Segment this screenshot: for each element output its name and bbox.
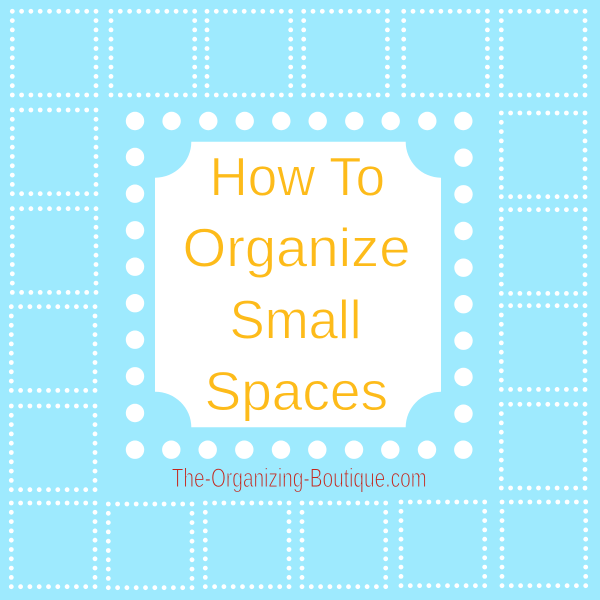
dotted square: top row 1: [10, 9, 98, 97]
panel: white title plaque with notched corners: [155, 142, 441, 427]
dotted square: top row 4: [301, 9, 390, 97]
dotted square: top row 3: [205, 9, 293, 97]
dotted square: bottom row 2: [106, 502, 194, 590]
dotted square: left column 2: [10, 206, 98, 295]
dotted square: bottom row 1: [9, 501, 97, 589]
dotted square: top row 5: [401, 9, 490, 97]
title line: How To: How To: [210, 146, 385, 208]
title line: Organize: Organize: [182, 217, 410, 279]
dotted square: right column 2: [499, 207, 587, 296]
dotted square: bottom row 3: [203, 501, 291, 589]
title: [182, 146, 410, 422]
dotted square: bottom row 6: [500, 500, 588, 588]
dotted square: left column 1: [10, 108, 98, 196]
title line: Spaces: Spaces: [204, 360, 388, 422]
dotted square: right column 1: [499, 111, 587, 199]
title line: Small: Small: [230, 288, 362, 350]
large dots frame: [126, 112, 473, 459]
dotted square: right column 3: [499, 303, 587, 392]
dotted square: right column 4: [499, 402, 587, 490]
website credit: The-Organizing-Boutique.com: [172, 463, 427, 493]
dotted square: bottom row 4: [300, 501, 388, 589]
dotted square: left column 3: [9, 304, 97, 393]
dotted square: bottom row 5: [399, 500, 487, 588]
dotted square: top row 6: [499, 9, 587, 97]
dotted square: left column 4: [9, 404, 97, 492]
dotted square: top row 2: [109, 9, 197, 97]
